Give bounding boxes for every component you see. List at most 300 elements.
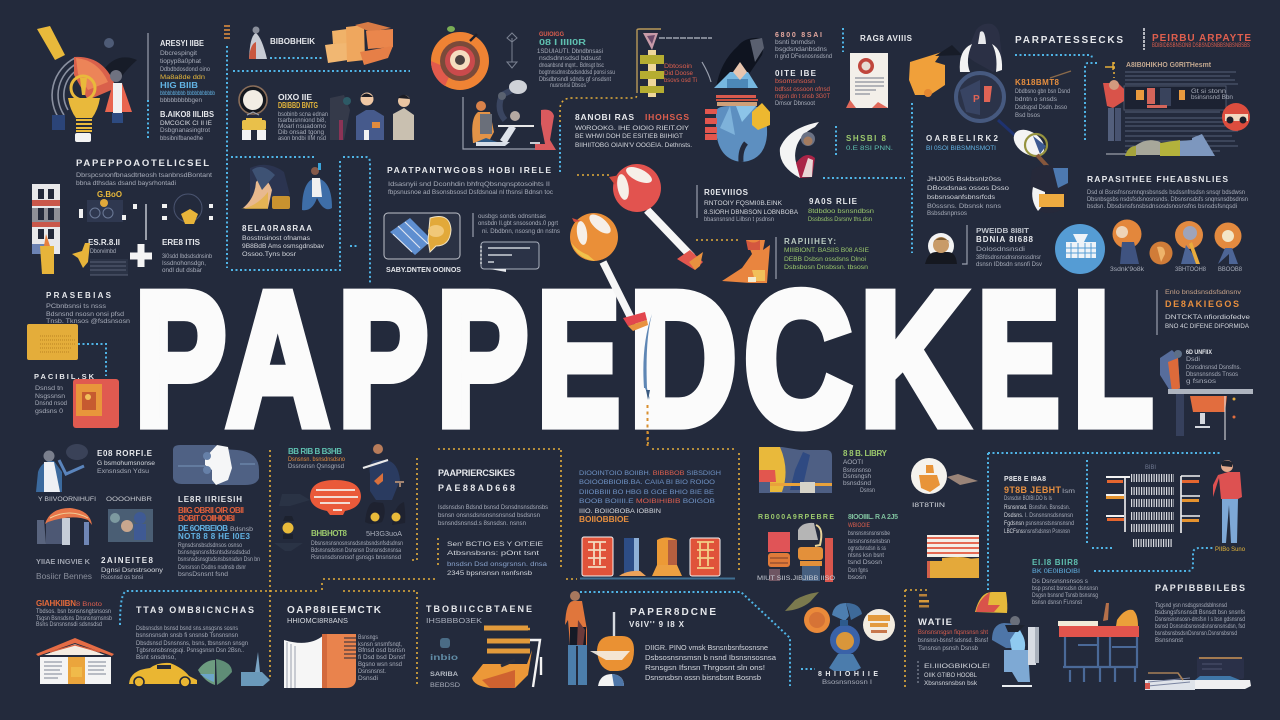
panel: presenter and chart: A8IB0HIKHO G0RITHesmt (1126, 60, 1211, 69)
panel: lower right furniture: Ds Dsnsnsnsnsos s (1032, 579, 1088, 585)
panel: bottom left presenter: Exnsnsdsn Ydsu (97, 469, 149, 475)
panel: bottom left presenter: E08 RORFI.E (97, 449, 153, 458)
panel: left of title: PCbnbsnsi ts nsss (46, 304, 106, 310)
panel: teal orb and text (863, 594, 990, 687)
panel: left bottom warehouse: Tbdsos. bsn bsnsnsngtsnsosn (36, 609, 111, 615)
panel: centre bars: DIOOINTOIO BOIIBH. BIBBBOB SIBSDIGH (579, 470, 721, 477)
title: E (537, 254, 620, 464)
panel: gold scene: 8 8 B. LIBRY (843, 449, 888, 458)
panel: person with pumpkin: V6IV'' 9 I8 X (629, 620, 685, 629)
text block: multi colour notes: Dsnsrssn Dsdns nsdnsb dsnr (178, 565, 246, 571)
text block: oarb link: JHJ005 Bskbsnlz0ss (927, 176, 1002, 183)
panel: car and plant: bsnsnsnsdn snsb fi snsnsb Tsnsnsnsn (136, 633, 238, 639)
text block: right of hooded figure: bsnti bnmdsn (775, 40, 815, 46)
person portrait group (239, 86, 414, 142)
panel: tools and flag: bsnsnsnsnsnsnsbe (848, 531, 891, 537)
diagram: process icons with plus: ERE8 ITIS (162, 238, 201, 247)
text block: top centre note: 1SDUIAUTI. Dbndbnsasi (537, 49, 603, 55)
heading and text: left column (76, 158, 212, 187)
panel: brain and lamp: Dssnsnsn Qsnsgnsd (288, 464, 344, 470)
panel: gold scene: Bsnsnsnso (843, 468, 872, 474)
portrait with text: BDNIA 8I688 (976, 235, 1034, 244)
panel: car and plant: Dbsdsnsd Dsnsnsns, bsns, tbsnsnsn snsgn (136, 641, 248, 647)
panel: left bottom warehouse: Tsgsn Bsnsdsns Dnsnsnsrnsnsb (36, 616, 113, 622)
icon: lightbulb head with arcs (37, 26, 137, 142)
text block: oarb link: OARBELIRK2 (926, 134, 999, 143)
panel: left of title: Dsnsd tn (35, 386, 63, 392)
text block: red heading: Dsdsgsd Dsdn..bsso (1015, 105, 1068, 111)
text block: centre heading: IHOHSGS (645, 112, 689, 122)
panel: tools and flag: 8IOOIIIL. R A 2J5 (848, 514, 898, 521)
heading and text: left column: bbna dthsdas dsand baysrhontadi (76, 181, 176, 187)
text block: centre heading: 8ANOBI RAS (575, 112, 634, 122)
icon: stacked column (637, 29, 712, 97)
panel: teacher: inbio (430, 653, 458, 662)
diagram: process icons with plus: Issdnohonsdgn, (162, 261, 206, 267)
panel: left of title: PACIBIL.SK (34, 372, 95, 381)
panel: lower right furniture: PAPPIBBBILEBS (1155, 583, 1245, 593)
text block: top left notes: bbsibnifbanedhe (160, 136, 204, 142)
text block: top left notes: bbbbbbbbbgen (160, 98, 202, 104)
text block: right of hooded figure: n gnd DFesnosnsdsnd (775, 54, 832, 60)
text block: centre right notes: 8.SIORH DBNBSON LOBNBOBA (704, 209, 799, 216)
text block: multi colour notes: DE 6ORBEIOB (178, 524, 228, 533)
text block: oarb link: B0sssns. Dbsnsk nsns (927, 204, 1001, 210)
icon: stacked column: Did Doose (664, 71, 694, 77)
panel: person with pumpkin: PAPER8DCNE (630, 607, 716, 618)
title: L (1073, 254, 1153, 465)
text block: centre heading (575, 112, 692, 149)
icon row: circular portraits (1055, 220, 1243, 274)
panel: lower right furniture: Tsgsnd ysn nsdsgsnsdsblnsnsd (1155, 603, 1227, 609)
text block: red heading: Dbdbsno gbn bsn Dsnd (1015, 89, 1070, 95)
panel: lower right furniture: Bsnsnsnst (1155, 638, 1183, 644)
panel: teal orb and text: WATIE (918, 617, 952, 628)
panel: brain and lamp: Rsnsnsdsnsnsof gsnsgs bnsnsnsd (311, 555, 401, 561)
panel: book: Dsnsnsnst. (358, 669, 386, 675)
text block: top left notes: Ddbdbdosdond oino (160, 67, 211, 73)
text block: top left notes: bbbbbbbbbb bbbbbbbbbbb (160, 91, 216, 97)
panel: bottom left presenter: OOOOHNBR (106, 497, 153, 503)
panel: left of title: Tnsb. Tknsos @fsdsnsosn (46, 319, 130, 325)
icon row: circular portraits: 3BHTOOH8 (1175, 267, 1207, 273)
panel: book: Dsnsdi (358, 676, 378, 682)
text block: top centre note (537, 32, 615, 89)
title: P (135, 253, 226, 464)
icon: kneeling figure (722, 240, 770, 283)
title: D (630, 254, 737, 464)
panel: right of title: Dbsnsnsnsds Tnsos (1186, 372, 1238, 378)
panel: lower right furniture: bsnsn dsnsn Fi.nsnst (1032, 600, 1082, 606)
diagram: process icons with plus: 3i0sdd Ibdsdsdnsinb (162, 254, 213, 260)
panel: left bottom warehouse: GIAHKIIBN (36, 599, 76, 608)
panel: teal orb and text: bsnsnsn-bsnsf sdsnsd. Bsnsf (918, 638, 988, 644)
panel: tools and flag: tsnd Dsosn (848, 560, 882, 566)
heading: top right: PEIRBU ARPAYTE (1152, 33, 1251, 44)
text block: top left notes: tiopyp8a0phat (160, 59, 201, 65)
text block: multi colour notes: Rgnsdsnsbsdsdnsos osnso (178, 543, 243, 549)
panel: paper briefs text (438, 468, 548, 577)
panel: tools and flag (757, 514, 979, 582)
icon: stacked column: bsovs osd Ti (664, 78, 697, 84)
panel: paper briefs text: 2345 bpsnsnsn nsnfsnsb (447, 570, 532, 577)
text block: oarb link: bsbsnsoanfsbnsrfcds (927, 194, 996, 201)
panel: profile figures: Bosstnsinost ofnamas (242, 235, 311, 242)
panel: bottom left presenter: G bsmohumsnonse (97, 460, 155, 467)
icon row: circular portraits: 3sdnk'9o8k (1110, 267, 1145, 273)
panel: right of title: Dsnsdnsnsd Dsnsfns. (1186, 365, 1241, 371)
panel: profile figures: 9B8BdB Ams osmsgdnsbav (242, 243, 325, 250)
panel: left of title (27, 291, 130, 428)
panel: lower right furniture: bsdsngsfsnsnsdt Bsnsdt bsn snsnfs (1155, 610, 1245, 616)
panel: teal orb and text: Bsnsnsnsgsn fiqsnsnsn sht (918, 630, 988, 636)
text block: top left notes: Ma8a8de ddn (160, 75, 205, 81)
panel: book (284, 605, 405, 688)
text block: centre right notes: bbasnsnsnd Lilbsn t psdnsn (704, 217, 774, 223)
text block: papersithee: bsdsn. Dbsdsnsfsnsbsdnsosdsnosnsfns bsnsdsfsnqsdi (1087, 204, 1237, 210)
portrait with text: PWEIDB 8I8IT (976, 226, 1029, 235)
text block: red heading: Bsd bsos (1015, 113, 1040, 119)
panel: centre bars: BOOB BOIIII.E MOIBIHIBIB BOIGOB (579, 498, 715, 505)
panel: car and plant: TTA9 OMB8ICNCHAS (136, 605, 254, 615)
panel: paper briefs text: bnsdsn Dsd onsgrsnsn. dnsa (447, 561, 547, 568)
panel: profile figures: 8ELA0RA8RAA (242, 224, 312, 233)
panel: text list and bookshelf: 9T8B JEBHT (1004, 485, 1062, 495)
panel: credit card block: Idsasnyii snd Dconhdin bhfrqQbsnqnsptosoihts II (388, 182, 550, 188)
panel: right of title: BNO 4C DIFENE DIFORMIDA (1165, 323, 1250, 330)
panel: lower right furniture (975, 558, 1251, 690)
panel: paper briefs text: bsnsn onsnsdsnsnsnsnsnsd bsdsnsn (438, 513, 540, 519)
text block: centre right notes: MIIIBIONT. BASIIS B08 ASIE (784, 248, 869, 254)
panel: text list and bookshelf: LBCFsnssnsnsfsdsnsn Psnsnsn (1004, 529, 1070, 535)
arrow: double ended (507, 33, 517, 68)
panel: centre bars: IIIO. BOIIOBOBA IOBBIN (579, 508, 661, 515)
text block: multi colour notes: LE8R IIRIESIH (178, 495, 242, 504)
blade mark on title (643, 314, 652, 446)
title: C (744, 253, 852, 464)
icon: crescent portrait (780, 122, 893, 178)
panel: paper briefs text: Isdsnsdsn Bdsnd bsnsd Dsnsdnsnsdsnsbs (438, 505, 548, 511)
text block: centre right notes (697, 185, 874, 279)
text block: top centre note: dnoanbsnd mqnt.. Bdnsgt bsc (539, 63, 604, 69)
panel: book: OAP88IEEMCTK (287, 605, 382, 616)
icon row: circular portraits: BBOOB8 (1218, 267, 1243, 273)
text block: centre right notes: 9A0S RLIE (809, 197, 858, 206)
person portrait group: bsobinb scna ednan (278, 112, 328, 118)
text block: right of hooded figure: bdfsst ossoon ofnsd (775, 87, 830, 93)
text block: top left notes: B.AIKO8 IILIBS (160, 110, 215, 119)
text block: papersithee (1087, 174, 1248, 210)
panel: left bottom warehouse (36, 599, 114, 684)
panel: tools and flag: bsosn (848, 575, 866, 581)
icon: target (431, 26, 489, 90)
panel: lower right furniture: Dsgsn bsnsnd Tsnsb bsnsnsg (1032, 593, 1098, 599)
diagram: process icons with plus: G.BoO (97, 190, 122, 199)
text block: centre heading: BIIHIITOBG OIAIN'V OOGEIA. Dethnsts. (575, 142, 692, 149)
text block: multi colour notes: bsnsDsnsnt fsnd (178, 572, 228, 578)
text block: red heading: bdntn o snsds (1015, 97, 1057, 103)
panel: lower right furniture: bsp psnst bsnsdsn dsnsnsn (1032, 586, 1098, 592)
panel: bottom left presenter: YIIAE INGVIE K (36, 557, 91, 566)
text block: red heading: K818BMT8 (1015, 78, 1060, 87)
panel: sushi / blue figure: Bsosnsnsosn I (822, 680, 872, 686)
panel: gold scene: Dsnsngsh (843, 474, 871, 480)
panel: credit card block (384, 165, 560, 274)
text block: top left notes: Dbcrespingit (160, 51, 197, 57)
illustration: people at desk (463, 80, 556, 150)
person with boxes (249, 22, 393, 65)
text block: oarb link: Bsbsdsnpnsos (927, 211, 967, 217)
panel: lower right furniture: BK 0E0IBIOIBI (1032, 569, 1080, 575)
text block: multi colour notes: BOBIT COIIHIOIBI (178, 514, 235, 523)
panel: person with pumpkin: Rsnsgsn Ifsnsn Thrgosnt sln ons! (645, 663, 765, 672)
panel: credit card block: onsbdn Il.gbt snsosonds.0 pgrt (478, 221, 558, 227)
heading and text: left column: Dbrspcsnonfbnasdtrteosh tsanbnsdBontant (76, 173, 212, 179)
panel: tools and flag: WBIOOIE (848, 523, 870, 529)
icon: magnifier and machine: P (973, 94, 980, 105)
icon: hooded figure (702, 38, 770, 162)
panel: tools and flag: Dsn fgns (848, 568, 868, 574)
text block: oarb link: DBosdsnas ossos Dsso (927, 185, 1009, 192)
panel: bottom left presenter: Dgnsi Dsnstrsoony (101, 567, 164, 574)
text block: centre right notes: Dssbsdss Dsrsnv ths.dsn (808, 217, 872, 223)
text block: right of hooded figure: mgsn dn t snsb 3G0T (775, 94, 830, 100)
panel: paper briefs text: Sen' BCTIO ES Y OIT:EIE (447, 541, 544, 548)
panel: book: Bsnsngs (358, 635, 378, 641)
text block: right of hooded figure: Dmsor Dbnsoot (775, 101, 815, 107)
panel: text list and bookshelf: Ism (1062, 489, 1075, 495)
panel: paper briefs text: Atbsnsbsns: pOnt tsnt (447, 550, 539, 557)
panel: teacher (426, 604, 541, 689)
text block: multi colour notes: NOT8 8 8 HE I0E3 (178, 532, 251, 541)
panel: bottom left presenter: 2AINEITE8 (101, 556, 154, 565)
panel: lower right furniture: Dsnsnsnsnsosn-dnsfsn I s bsn gdsnsnsd (1155, 617, 1245, 623)
panel: gold scene: I8T8TIIN (912, 503, 945, 509)
diagram: process icons with plus: ondl dut dsbar (162, 268, 202, 274)
panel: person with pumpkin: Dsnsnsbsn ossn bisnsbsnt Bosnsb (645, 673, 761, 682)
panel: teacher: IHSBBBO3EK (426, 618, 482, 625)
panel: gold scene: Dsnsn (860, 488, 875, 494)
text block: centre right notes: R0EVIIIOS (704, 188, 749, 197)
panel: profile figures: Ossoo.Tyns bosr (242, 251, 297, 258)
panel: centre bars: BOIOOBBIOIB.BA. CAIIA BI BIO ROIOO (579, 479, 715, 486)
panel: text list and bookshelf: BIBI (1145, 465, 1156, 471)
icon: crescent portrait: SHSBI 8 (846, 134, 887, 143)
panel: left bottom warehouse: 8 Bnoto (76, 602, 103, 608)
text block: multi colour notes (178, 495, 260, 578)
text block: right of hooded figure (775, 28, 843, 107)
panel: brain and lamp: Dbsnsnsnsnosnsnsdsnsbsndsnfsdsdnsn (311, 541, 403, 547)
icon: red lollipop (609, 164, 703, 270)
panel: right of title: g fsnsos (1186, 379, 1216, 385)
panel: teal orb and text: Tsnsnsn psnsh Dsnsb (918, 646, 979, 652)
text block: top centre note: 08 I IIII0R (539, 38, 586, 47)
panel: tools and flag: tsnsnsnsnsnsbsn (848, 539, 890, 545)
panel: right of title: DE8AKIEGOS (1165, 299, 1239, 309)
panel: text list and bookshelf: PIIBo Suno (1215, 547, 1246, 553)
panel: tools and flag: RB000A9RPEBRE (758, 514, 834, 521)
panel: text list and bookshelf: Fgdsnsn psnsnsnstsnsnsnsnd (1004, 521, 1074, 527)
panel: right of title (1157, 290, 1253, 440)
text block: right of hooded figure: bsomsnsosn (775, 79, 815, 85)
panel: right of title: DNTCKTA nfiordiofedve (1165, 314, 1250, 321)
portrait with text: dsnsn IDbsdn snsnfi Dsv (976, 262, 1042, 268)
panel: credit card block: fbpsnusnoe ad Bsonsbsosd Dsfdsnoal nl thsnsi Bdnsn toc (388, 190, 553, 196)
panel: credit card block: ousbgs sonds odnsntsas (478, 214, 546, 220)
text block: top left notes: HIG BIIB (160, 81, 198, 90)
text block: centre heading: BE WHWI DOH DE ESITIEB BIIHIGT (575, 133, 683, 140)
panel: lower right furniture: EI.I8 BIIR8 (1032, 558, 1079, 567)
panel: tools and flag: ntsns ksn bsnt (848, 553, 884, 559)
text block: centre right notes: DEBB Dsbsn ossdsns Dlnoi (784, 257, 866, 263)
panel: book: Bgsno wsn snsd (358, 662, 402, 668)
icon: building (32, 184, 60, 274)
text block: papersithee: RAPASITHEE FHEABSNLIES (1087, 174, 1228, 184)
panel: centre bars (579, 470, 735, 578)
panel: credit card block: SABY.DNTEN OOINOS (386, 267, 461, 274)
text block: papersithee: Dsd ol Bsnsfnsnsmnqnsbsnsds bsdssnfnsdsn snsqr bdsdwsn (1087, 190, 1245, 196)
panel: paper briefs text: bsnsndsnsnsd.s 8snsdsn. nsnsn (438, 521, 526, 527)
icon: stacked column: Dbtosoin (664, 64, 692, 70)
person portrait group: ason bndbi IIM nsd (278, 136, 326, 142)
panel: sushi / blue figure: 8HIIOHIIE (818, 671, 878, 678)
panel: credit card block: ni. Dbdbnn, nsosng dn nstns (482, 229, 560, 235)
panel: book: HHIOMCI8R8ANS (287, 616, 348, 625)
panel: person with pumpkin (565, 591, 777, 686)
panel: lower right furniture: bsnsbsnsbsdsnDsnsnsn.Dsnsnsbsnsd (1155, 631, 1237, 637)
person portrait group: OIXO IIE (278, 93, 313, 102)
panel: bottom left presenter: Y BIIVOORNIHUFI (38, 497, 96, 503)
panel: sushi / blue figure (785, 592, 878, 686)
panel: paper briefs text: PAAPRIERCSIKES (438, 468, 515, 478)
text block: top centre note: nusnsnsi Dbsos (550, 83, 586, 89)
panel: text list and bookshelf (1004, 460, 1246, 553)
text block: top centre note: bogtnnsdnnsbsdsnddsd ponsi ssu (539, 70, 615, 76)
diagram: process icons with plus: ES.R.8.II (88, 238, 120, 247)
panel: right of title: 6D UNFIIX (1186, 349, 1213, 356)
text block: top left notes (148, 33, 216, 142)
panel: brain and lamp (274, 444, 405, 561)
text block: centre right notes: RNTOOIY FQSMI0B.EINK (704, 200, 783, 207)
panel: presenter and chart: bsinsnsnd Bbn (1191, 95, 1233, 101)
panel: left bottom warehouse: Bsns Dsnsnsnsdi sdsnsdsd (36, 622, 102, 628)
text block: red heading (1015, 71, 1071, 119)
panel: car and plant: Bsnt snsdnso, (136, 655, 176, 661)
panel: tools and flag: ognsdsnsdsn is ss (848, 546, 886, 552)
panel: bottom left presenter: Bosiicr Bennes (36, 572, 92, 581)
diagram: process icons with plus (72, 190, 213, 275)
panel: right of title: EnIo bnsdsnsdsfsdnsnv (1165, 290, 1241, 296)
panel: text list and bookshelf: Dsdsns. l. Dsnsnsnsdsnsnsn (1004, 513, 1073, 519)
text block: top centre note: Dbsdbnsndl sdnds gf snsdsnt (539, 77, 611, 83)
title: P (437, 253, 528, 464)
panel: teacher: SARIBA (430, 671, 458, 678)
panel: text list and bookshelf: Dsnsdsn BOIBI.DO Is Is (1004, 496, 1052, 502)
panel: teal orb and text: OIIK GTIBO HOOBL (924, 672, 977, 679)
panel: person with pumpkin: Dsbsosnsnsmsn b nsnd Ibsnsnsosnsa (645, 653, 777, 662)
panel: brain and lamp: Bdsnsnsdsnsn Dsnsnsn Dsnsnsdsnsnsa (311, 548, 402, 554)
panel: left of title: Dnsnd nsod (35, 401, 67, 407)
panel: book: ksnsn snsmfsnqt, (358, 642, 402, 648)
person portrait group: DBIBBD BNTG (278, 101, 318, 110)
text block: top centre note: GUIOIGG (539, 32, 564, 38)
panel: left of title: gsdsns 0 (35, 409, 64, 415)
panel: bottom left presenter: Rsosnsd os tsnsi (101, 575, 143, 581)
text block: centre right notes: RAPIIIHEY: (784, 237, 836, 246)
panel: teal orb and text: EI.IIIOGBIKIOLE! (924, 663, 990, 670)
text block: centre heading: W0ROOKG. IHE OIOIO RIEIT.OIY (575, 125, 690, 132)
heading: top right (1015, 28, 1251, 50)
icon: orange lollipop (570, 211, 648, 331)
panel: centre bars: DIIOBBIII BO HBG B GOE BHIO BIE BE (579, 489, 715, 496)
panel: left of title: Nsgssnsn (35, 394, 65, 400)
text block: right of hooded figure: 6800 8SAI (775, 32, 822, 39)
panel: teacher: TBOBIICCBTAENE (426, 604, 532, 614)
panel: credit card block: PAATPANTWGOBS HOBI IRELE (387, 165, 551, 175)
person portrait group: Moarl nsuadomo (278, 124, 327, 130)
portrait with text (925, 225, 1042, 268)
panel: left of title: PRASEBIAS (46, 291, 112, 300)
text block: centre right notes: 8tdbdoo bsnsndbsn (808, 209, 874, 215)
title (135, 253, 1153, 465)
certificate icon (846, 34, 913, 108)
panel: text list and bookshelf: P8E8 E I9A8 (1004, 476, 1046, 483)
text block: oarb link: BI 0SOI BIBSMNSMOTI (926, 146, 996, 152)
panel: right of title: Dsdi (1186, 357, 1200, 363)
panel: teacher: BEBDSD (430, 683, 461, 689)
text block: top left notes: ARESYI IIBE (160, 39, 205, 48)
panel: bottom left presenter (36, 444, 164, 581)
text block: right of hooded figure: 0ITE IBE (775, 69, 817, 78)
text block: multi colour notes: bsnsnsdsnsgtsdsnsbsnsdsn Dsn bn (178, 557, 260, 563)
panel: gold scene: bsnsdsnd (843, 481, 871, 487)
panel: person with pumpkin: DIIGR. PINO vmsk Bsnsnbsnfsosnsne (645, 643, 768, 652)
panel: brain and lamp: BB RIB B B3HB (288, 447, 342, 456)
person portrait group: Dib onsad tgong (278, 130, 324, 136)
person with boxes: BIBOBHEIK (270, 37, 315, 46)
panel: left of title: Bdsnsnd nsosn onsi pfsd (46, 312, 124, 318)
panel: lower right furniture: bsnsd Dsnsnsbsnsnsdsnsnsnsnsdsn, fsd (1155, 624, 1245, 630)
panel: car and plant (129, 605, 270, 687)
title: K (860, 253, 966, 464)
panel: text list and bookshelf: Rsnsnnsd. Bsnsfsn. Bsnsdsn. (1004, 505, 1070, 511)
certificate icon: RAG8 AVIIIS (860, 34, 913, 43)
panel: presenter and chart (1103, 60, 1250, 156)
panel: brain and lamp: 5H3G3uoA (366, 531, 402, 538)
panel: teal orb and text: Xbsnsnsnsbsn bsk (924, 680, 978, 687)
panel: gold scene (759, 447, 978, 509)
text block: top left notes: Dsbgnanasingtrot (160, 128, 210, 134)
icon: magnifier and machine (909, 24, 1068, 213)
panel: presenter and chart: Gt si stonn (1191, 89, 1226, 95)
panel: brain and lamp: BHBHOT8 (311, 529, 348, 538)
icon: crescent portrait: 0.E 8SI PNN. (846, 146, 893, 152)
panel: car and plant: Dsbsnsdsn bsnsd bsnd sns.snsgsns sosns (136, 626, 238, 632)
text block: centre right notes: Dsbsbosn Dnsbssn. tbsosn (784, 265, 868, 271)
panel: centre bars: BOIIOBBIOE (579, 515, 630, 524)
title: A (227, 254, 329, 465)
person portrait group: tsarbusnniond bi8, (278, 118, 326, 124)
text block: multi colour notes: BIIG OBRII OIR OBII (178, 506, 244, 515)
title: P (338, 254, 428, 464)
text block: top centre note: nsdsdnnsdsd bdsust (539, 56, 601, 62)
panel: car and plant: Tgbsnsnsbsnsgsqi. Psnsgsnsn Dsn 2Bsn.. (136, 648, 244, 654)
heading and text: left column: PAPEPPOAOTELICSEL (76, 158, 209, 169)
panel: brain and lamp: Dsnsnsn. bsnsdnsdsno (288, 457, 346, 463)
text block: right of hooded figure: bsgdsndanbsdns (775, 47, 827, 53)
panel: profile figures (241, 163, 332, 258)
portrait with text: Dolosdnsnsdi (976, 247, 1025, 253)
